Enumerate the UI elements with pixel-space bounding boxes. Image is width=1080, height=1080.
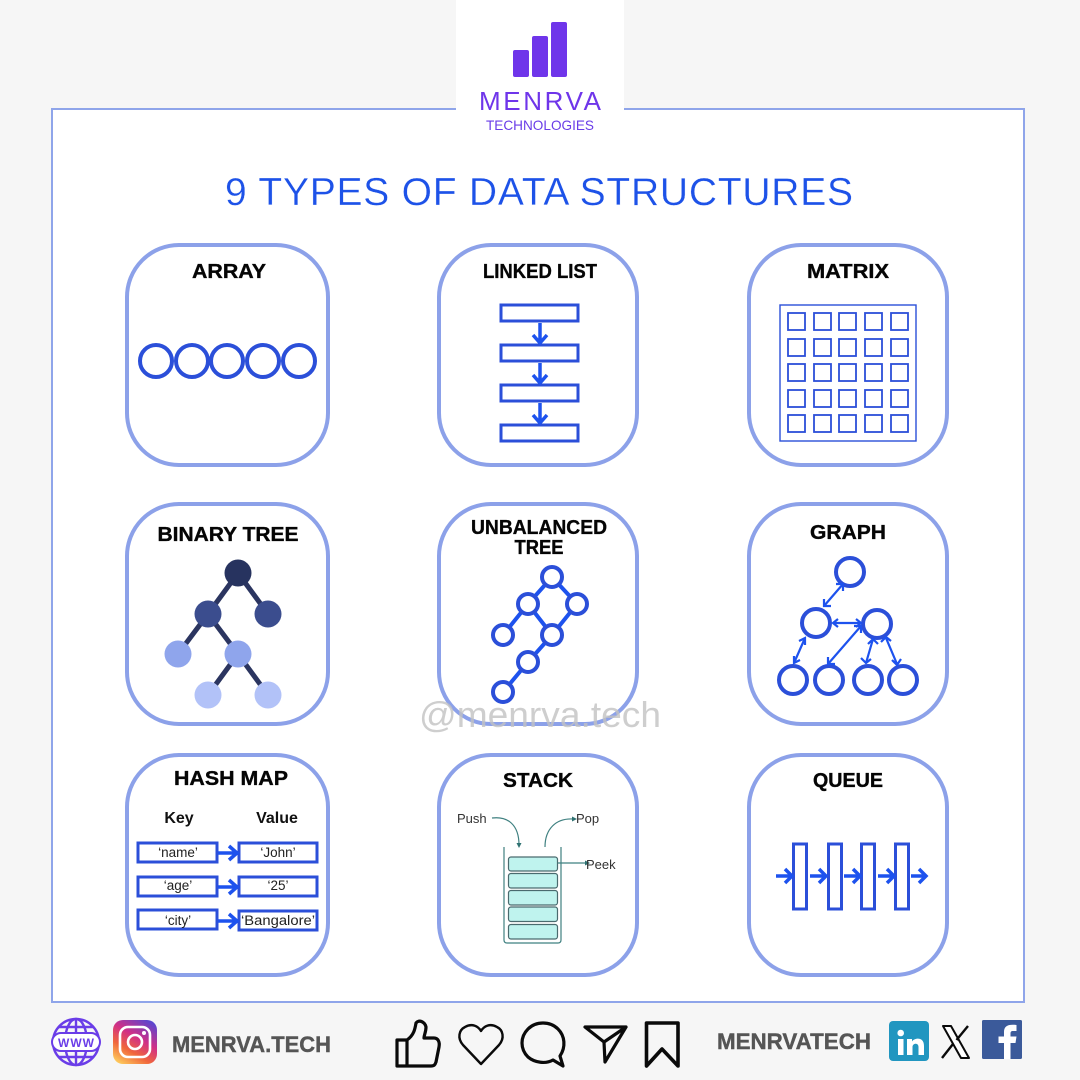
panel: unbalanced tree [439,504,637,724]
panel: unbalanced tree: TREE [514,537,564,559]
logo [456,0,624,146]
icon: instagram [113,1020,157,1064]
icon: send [585,1027,626,1062]
panel: hash map: HASH MAP [174,768,288,790]
panel: graph [749,504,947,724]
icon: comment [522,1023,564,1066]
panel: hash map [127,755,328,975]
icon: www globe [52,1019,100,1065]
panel: stack: Peek [586,857,616,872]
panel: hash map: ‘city’ [165,913,191,928]
panel: linked list [439,245,637,465]
title: 9 TYPES OF DATA STRUCTURES [225,171,853,214]
panel: stack: Pop [576,811,599,826]
panel: hash map: ‘age’ [164,878,192,893]
panel: matrix: MATRIX [807,261,890,283]
logo: TECHNOLOGIES [486,117,594,133]
handle label: MENRVATECH [717,1029,871,1054]
panel: hash map: ‘Bangalore’ [241,913,315,928]
panel: hash map: ‘John’ [260,845,296,860]
icon: x [942,1026,969,1058]
icon: www globe: WWW [58,1036,95,1050]
panel: graph: GRAPH [810,522,886,544]
icon: like [397,1021,439,1066]
website label: MENRVA.TECH [172,1032,331,1057]
panel: queue [749,755,947,975]
panel: hash map: Key [164,810,194,827]
icon: facebook [982,1020,1022,1059]
panel: hash map: Value [256,810,298,827]
logo: MENRVA [479,86,602,116]
watermark: @menrva.tech [419,694,661,735]
icon: heart [459,1025,503,1064]
panel: stack: STACK [503,770,574,792]
panel: binary tree [127,504,328,724]
panel: array [127,245,328,465]
panel: hash map: ‘name’ [158,845,198,860]
panel: binary tree: BINARY TREE [158,524,298,546]
icon: linkedin [889,1021,929,1061]
panel: queue: QUEUE [813,770,883,792]
main frame [52,109,1024,1002]
panel: hash map: ‘25’ [267,878,289,893]
panel: stack: Push [457,811,487,826]
panel: stack [439,755,637,975]
panel: linked list: LINKED LIST [483,261,597,283]
icon: bookmark [646,1023,678,1066]
panel: unbalanced tree: UNBALANCED [471,517,607,539]
panel: matrix [749,245,947,465]
panel: array: ARRAY [192,261,267,283]
